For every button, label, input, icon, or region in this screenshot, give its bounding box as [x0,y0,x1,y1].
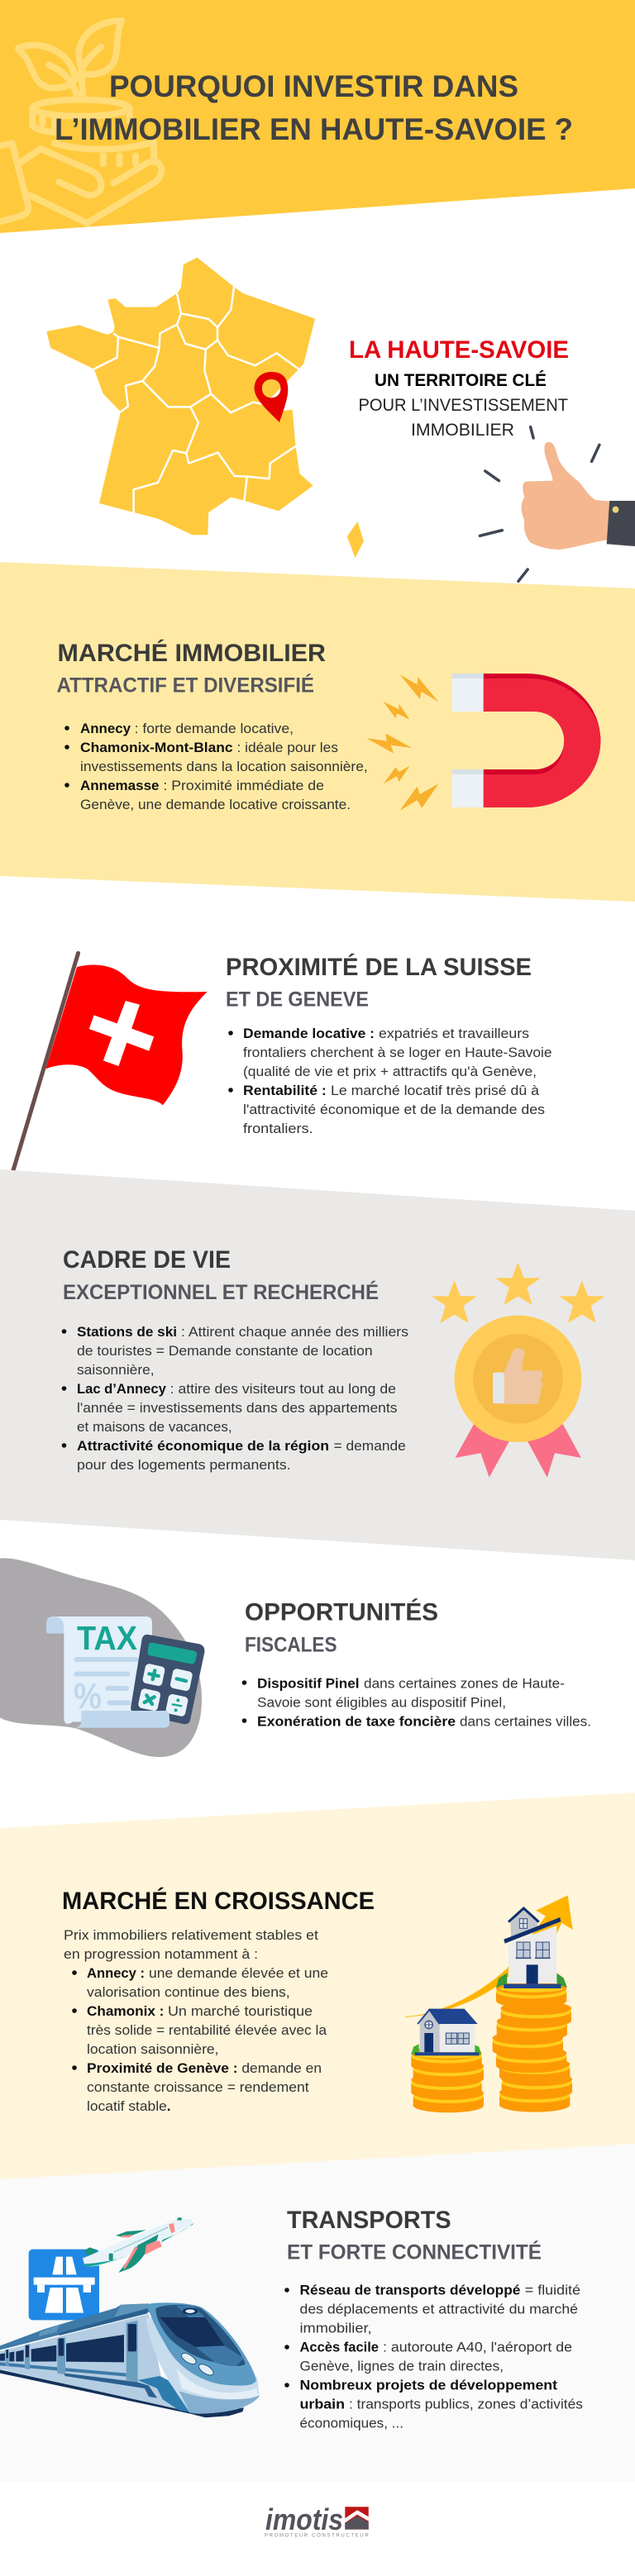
bullet list: Attractivité économique de la région [77,1438,329,1454]
panel: opportunités fiscales [0,1558,591,1757]
heading: PROXIMITÉ DE LA SUISSE [226,953,532,981]
heading: ET DE GENEVE [226,988,369,1012]
header background [0,0,635,233]
bullet list [228,1026,552,1136]
intro and bullet list: demande en [241,2060,322,2076]
intro and bullet list: une demande élevée et une [149,1965,328,1981]
intro and bullet list: Un marché touristique [168,2003,313,2019]
heading [56,639,326,698]
bullet list: Lac d’Annecy [77,1381,166,1397]
bullet list: Savoie sont éligibles au dispositif Pinel, [257,1694,506,1711]
text: Haute-Savoie [349,336,569,440]
bullet list [284,2283,583,2431]
panel: cadre de vie [0,1169,635,1560]
title [55,69,573,146]
panel: marché en croissance [0,1793,635,2179]
heading [245,1598,438,1657]
bullet list: des déplacements et attractivité du marché [299,2302,578,2317]
intro and bullet list: location saisonnière, [87,2041,218,2057]
icon: thumbs up [480,427,635,581]
intro and bullet list: constante croissance = rendement [87,2079,309,2095]
intro and bullet list: très solide = rentabilité élevée avec la [87,2022,327,2038]
heading: EXCEPTIONNEL ET RECHERCHÉ [63,1280,379,1304]
band background [0,1793,635,2179]
title: POURQUOI INVESTIR DANS [109,69,518,103]
heading: ET FORTE CONNECTIVITÉ [287,2240,542,2264]
bullet list: frontaliers. [243,1121,313,1136]
band background [0,562,635,902]
intro and bullet list: Annecy : [87,1965,145,1981]
bullet list: Annemasse [80,778,159,793]
heading: FISCALES [245,1634,337,1657]
bullet list: Réseau de transports développé [299,2283,520,2298]
panel: transports [0,2140,635,2482]
bullet list: Genève, lignes de train directes, [299,2359,504,2374]
bullet list: dans certaines villes. [460,1714,591,1729]
intro and bullet list [64,1927,328,2114]
intro and bullet list: Chamonix : [87,2003,164,2019]
bullet list: Nombreux projets de développement [299,2378,557,2393]
bullet list: Demande locative : [243,1026,375,1041]
band background [0,2140,635,2482]
intro and bullet list: . [167,2098,171,2114]
icon: airplane [82,2217,193,2273]
logo: imotis: imotis [265,2502,343,2536]
bullet list: (qualité de vie et prix + attractifs qu'à Genève, [243,1064,537,1079]
icon: magnet with lightning bolts [366,674,600,811]
icon: houses on coin stacks with rising arrow [405,1895,573,2112]
bullet list: Accès facile [299,2340,379,2355]
bullet list: immobilier, [299,2321,372,2336]
bullet list: et maisons de vacances, [77,1419,232,1435]
title: L’IMMOBILIER EN HAUTE-SAVOIE ? [55,112,573,146]
panel: marché immobilier [0,562,635,902]
heading [63,1246,379,1304]
bullet list: investissements dans la location saisonnière, [80,759,368,774]
bullet list: : Proximité immédiate de [163,778,324,793]
bullet list: Genève, une demande locative croissante. [80,797,351,812]
bullet list [64,721,368,812]
map of France [46,258,364,558]
icon: tax document and calculator [46,1617,204,1728]
heading: ATTRACTIF ET DIVERSIFIÉ [56,674,314,698]
text: Haute-Savoie: IMMOBILIER [411,420,514,440]
bullet list: expatriés et travailleurs [379,1026,529,1041]
bullet list: : forte demande locative, [135,721,294,736]
icon: high-speed train [0,2302,260,2417]
bullet list: = fluidité [525,2283,580,2298]
heading [226,953,532,1012]
bullet list: saisonnière, [77,1362,155,1378]
bullet list: Exonération de taxe foncière [257,1714,456,1729]
bullet list: Le marché locatif très prisé dû à [331,1083,540,1098]
icon: map pin [255,372,288,422]
icon: tax document and calculator: % [74,1676,102,1717]
bullet list [62,1324,408,1473]
heading: MARCHÉ IMMOBILIER [58,639,326,667]
icon: tax document and calculator: TAX [77,1619,137,1657]
bullet list: l'attractivité économique et de la demande des [243,1102,545,1117]
heading: CADRE DE VIE [63,1246,231,1274]
bullet list: : Attirent chaque année des milliers [181,1324,408,1340]
intro and bullet list: Prix immobiliers relativement stables et [64,1927,318,1943]
bullet list: = demande [334,1438,406,1454]
text: Haute-Savoie: LA HAUTE-SAVOIE [349,336,569,364]
panel: header [0,0,635,233]
decorative blob [0,1558,202,1757]
bullet list: de touristes = Demande constante de location [77,1343,373,1359]
bullet list: urbain [299,2397,345,2412]
bullet list: l'année = investissements dans des appartements [77,1400,397,1416]
text: Haute-Savoie: POUR L’INVESTISSEMENT [359,395,568,415]
icon: motorway sign [29,2250,99,2320]
bullet list: : autoroute A40, l'aéroport de [383,2340,572,2355]
heading: MARCHÉ EN CROISSANCE [62,1887,375,1915]
bullet list: : transports publics, zones d’activités [349,2397,583,2412]
icon: medal with stars [432,1262,604,1478]
bullet list: Annecy [80,721,131,736]
bullet list: économiques, ... [299,2416,403,2431]
bullet list [242,1676,591,1729]
icon: Swiss flag [13,953,208,1170]
heading: OPPORTUNITÉS [245,1598,438,1626]
bullet list: : attire des visiteurs tout au long de [170,1381,396,1397]
band background [0,1169,635,1560]
bullet list: frontaliers cherchent à se loger en Haute-Savoie [243,1045,552,1060]
icon: growing plant, coins and hand [0,21,161,223]
panel: la Haute-Savoie [46,258,635,581]
intro and bullet list: Proximité de Genève : [87,2060,238,2076]
bullet list: pour des logements permanents. [77,1457,291,1473]
heading: TRANSPORTS [287,2207,451,2234]
bullet list: : idéale pour les [236,740,338,755]
heading [287,2207,542,2264]
bullet list: Rentabilité : [243,1083,327,1098]
intro and bullet list: locatif stable [87,2098,167,2114]
logo: imotis: PROMOTEUR CONSTRUCTEUR [265,2534,369,2539]
panel: proximité de la Suisse [13,953,552,1170]
bullet list: Dispositif Pinel [257,1676,359,1691]
bullet list: dans certaines zones de Haute- [364,1676,565,1691]
text: Haute-Savoie: UN TERRITOIRE CLÉ [375,369,547,390]
intro and bullet list: en progression notamment à : [64,1946,258,1962]
bullet list: Stations de ski [77,1324,177,1340]
bullet list: Chamonix-Mont-Blanc [80,740,233,755]
intro and bullet list: valorisation continue des biens, [87,1984,290,2000]
